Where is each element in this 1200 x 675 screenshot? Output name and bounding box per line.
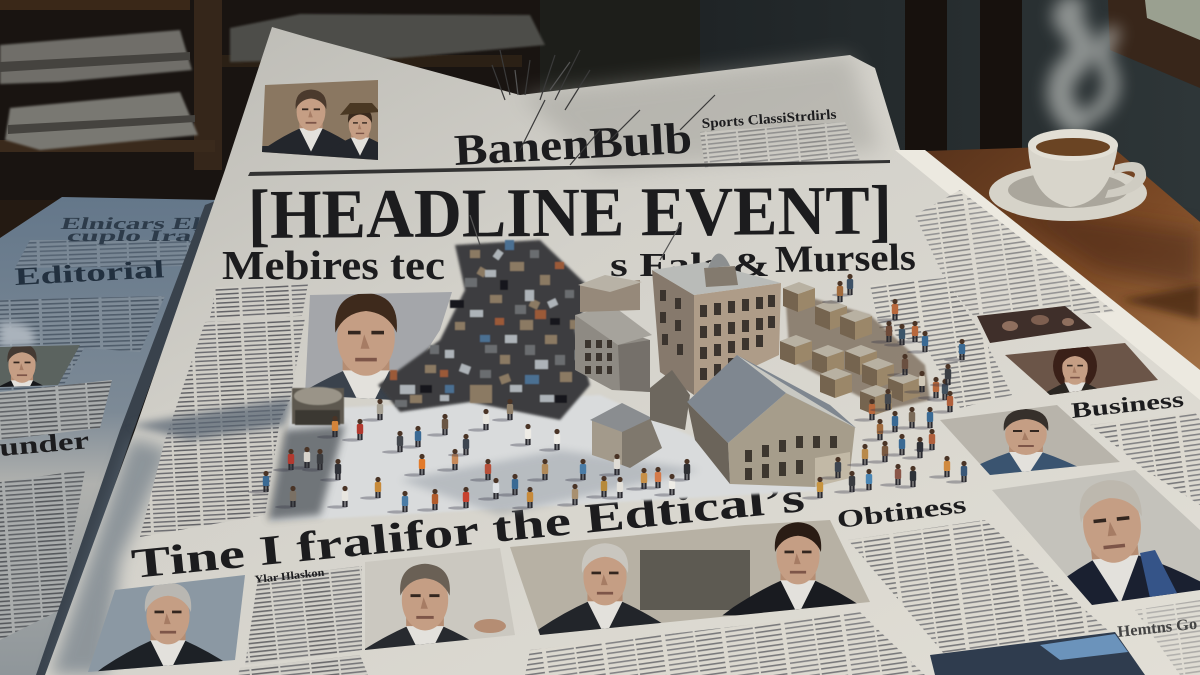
sub headline: right part: Mursels — [774, 237, 916, 281]
main paper: Obtiness body text — [848, 520, 1110, 655]
flying debris at fold — [470, 50, 715, 260]
right sheet crease — [895, 150, 1200, 400]
building: large front house — [687, 355, 856, 487]
masthead rule — [248, 160, 890, 176]
bottom right heading: Hemtns Go — [1117, 616, 1198, 641]
wooden table — [895, 145, 1200, 400]
main paper: bottom body text — [238, 566, 1200, 675]
masthead: small columns — [700, 122, 860, 168]
main paper: Business column text — [1090, 412, 1200, 505]
building: left grey block — [575, 305, 652, 392]
building: small block behind — [578, 275, 642, 312]
left newspaper — [0, 197, 219, 675]
left paper: sub headline: cuplo Irall — [65, 227, 212, 245]
steam — [1060, 8, 1112, 122]
main paper: left column text — [140, 284, 308, 537]
portrait: woman — [1005, 343, 1158, 395]
sub headline: middle part: s Fals & — [610, 247, 770, 284]
left paper: under heading: under — [0, 427, 90, 462]
sub headline: left part: Mebires tec — [222, 242, 445, 288]
portrait: large man with blue tie — [992, 470, 1200, 605]
debris pile — [292, 240, 592, 425]
building: tan cluster right — [780, 282, 930, 415]
portrait: bottom photo sky — [1040, 634, 1128, 660]
machine cluster at left of pile — [292, 387, 344, 425]
portrait: bottom group photo — [930, 632, 1145, 675]
portrait: centre man — [305, 292, 452, 400]
left paper: portrait — [0, 345, 80, 387]
main paper: right column text — [870, 190, 1115, 408]
portrait: man with glasses, bottom left — [88, 575, 245, 672]
building: small grey house — [590, 370, 690, 468]
bottom headline: Tine I fralifor the Edtical’s — [129, 475, 807, 588]
coffee cup on saucer — [989, 129, 1147, 221]
bookshelf with stacked newspapers — [0, 0, 545, 200]
portrait: crowd photo — [977, 306, 1092, 343]
paper shadow between sheets — [36, 200, 218, 675]
left paper: text blocks — [0, 240, 205, 640]
plaza: ground of the miniature scene — [130, 395, 830, 522]
masthead: section labels: Sports ClassiStrdirls — [701, 108, 838, 132]
portrait: man gesturing — [365, 548, 515, 650]
left paper: Editorial heading: Editorial — [14, 256, 165, 291]
masthead: BanenBulb — [453, 114, 693, 175]
top left portrait: two men — [262, 80, 378, 160]
column heading: Ylar Hlaskon — [254, 567, 325, 586]
building: central tower — [652, 253, 781, 395]
Business heading: Business — [1070, 386, 1185, 423]
Obtiness heading: Obtiness — [835, 491, 968, 534]
left paper: white patch of light — [0, 322, 35, 347]
crowd of miniature people — [248, 274, 967, 514]
portrait: man in blue suit — [940, 405, 1120, 475]
paper shadow: left side — [50, 440, 170, 675]
main headline: [HEADLINE EVENT] — [248, 173, 892, 254]
portrait: two men with shelves — [510, 520, 870, 635]
fold shadow — [520, 55, 880, 170]
window frame — [1108, 0, 1200, 88]
left paper: headline: Elnicars Elu — [59, 214, 219, 233]
